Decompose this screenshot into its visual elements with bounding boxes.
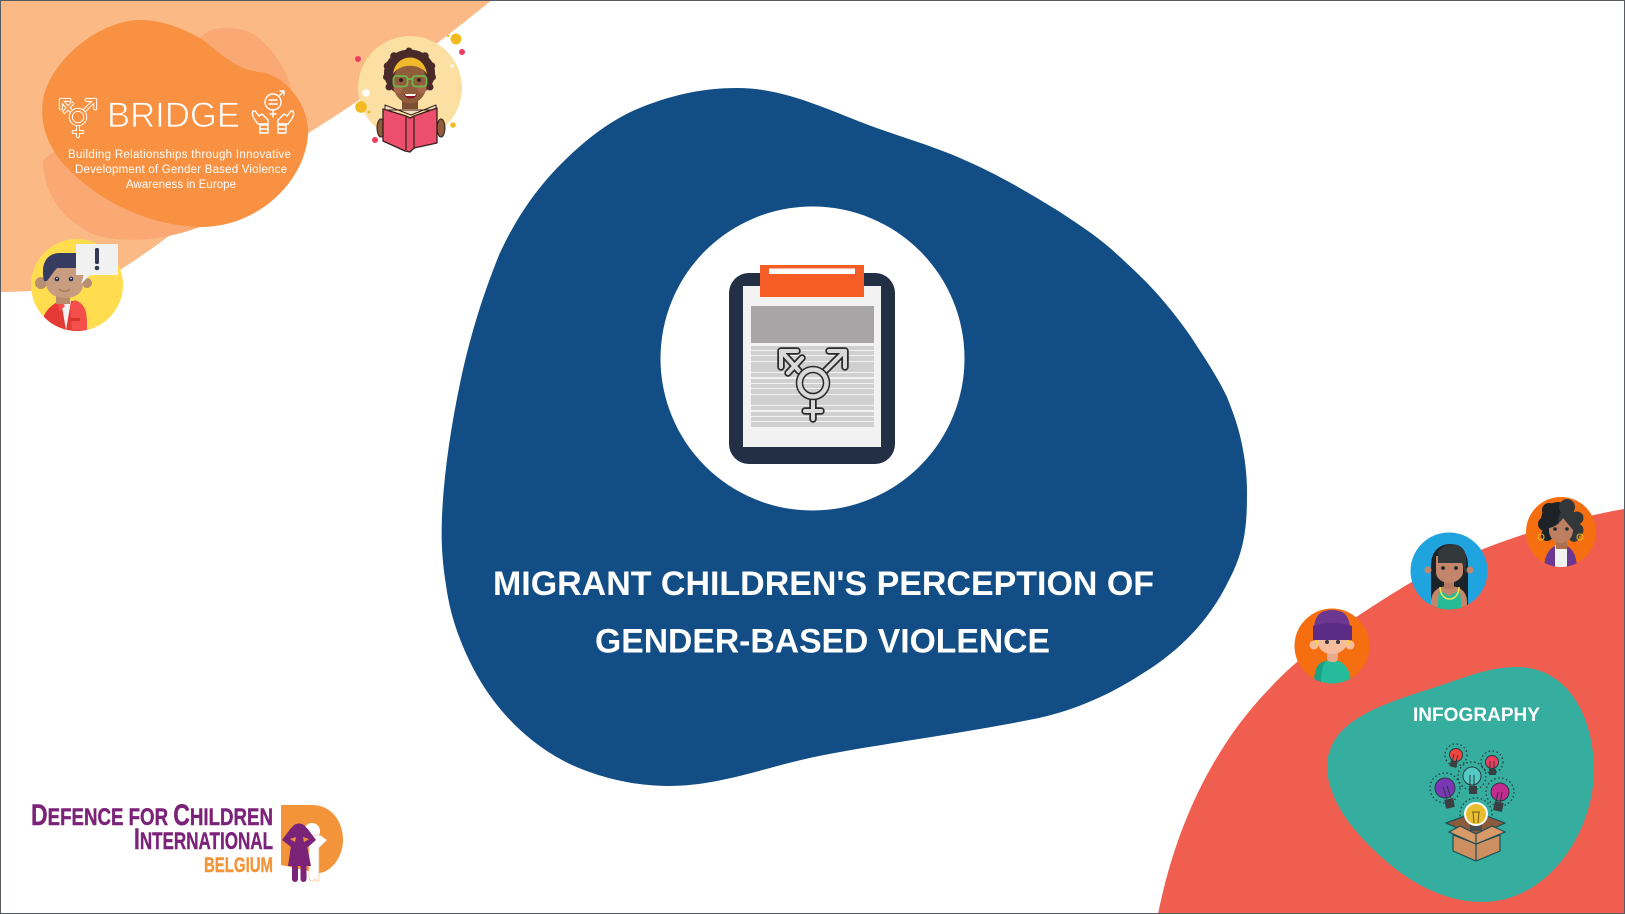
icon: clipboard with transgender symbol bbox=[729, 265, 895, 464]
transgender symbol bbox=[781, 351, 845, 419]
logo D mark bbox=[281, 805, 343, 873]
logo tagline bbox=[68, 149, 291, 191]
avatar: child with purple hat bbox=[1294, 608, 1370, 685]
avatar: woman with curly hair and earrings bbox=[1526, 497, 1596, 570]
central navy blob bbox=[442, 88, 1247, 786]
logo wordmark: DEFENCE FOR CHILDREN bbox=[31, 799, 273, 832]
avatar: boy with exclamation speech bubble bbox=[31, 239, 123, 335]
icon: transgender symbol bbox=[61, 100, 95, 136]
logo tagline: Awareness in Europe bbox=[126, 179, 236, 191]
white figure bbox=[304, 823, 327, 881]
background shape: peach corner bbox=[0, 0, 492, 292]
teal blob bbox=[1327, 667, 1594, 902]
logo wordmark: BELGIUM bbox=[204, 854, 273, 877]
logo tagline: Development of Gender Based Violence bbox=[75, 164, 287, 176]
logo: Defence for Children International Belgium bbox=[31, 799, 343, 882]
label: infography: INFOGRAPHY bbox=[1413, 704, 1540, 726]
background shape: red corner bbox=[1158, 509, 1624, 914]
purple figure bbox=[282, 824, 316, 882]
logo wordmark bbox=[31, 799, 273, 877]
icon: light bulbs rising from a box bbox=[1430, 744, 1514, 861]
avatar: girl with long black hair bbox=[1410, 532, 1488, 612]
title bbox=[493, 565, 1154, 660]
logo: BRIDGE bbox=[42, 20, 308, 240]
avatar: woman reading bbox=[355, 34, 465, 152]
speech bubble bbox=[76, 244, 118, 284]
title: GENDER-BASED VIOLENCE bbox=[595, 622, 1050, 660]
white circle bbox=[660, 206, 964, 510]
logo wordmark: BRIDGE bbox=[107, 96, 240, 135]
logo wordmark: INTERNATIONAL bbox=[134, 823, 273, 856]
logo tagline: Building Relationships through Innovative bbox=[68, 149, 291, 161]
title: MIGRANT CHILDREN'S PERCEPTION OF bbox=[493, 565, 1154, 603]
icon: gender equality in hands bbox=[252, 91, 294, 133]
